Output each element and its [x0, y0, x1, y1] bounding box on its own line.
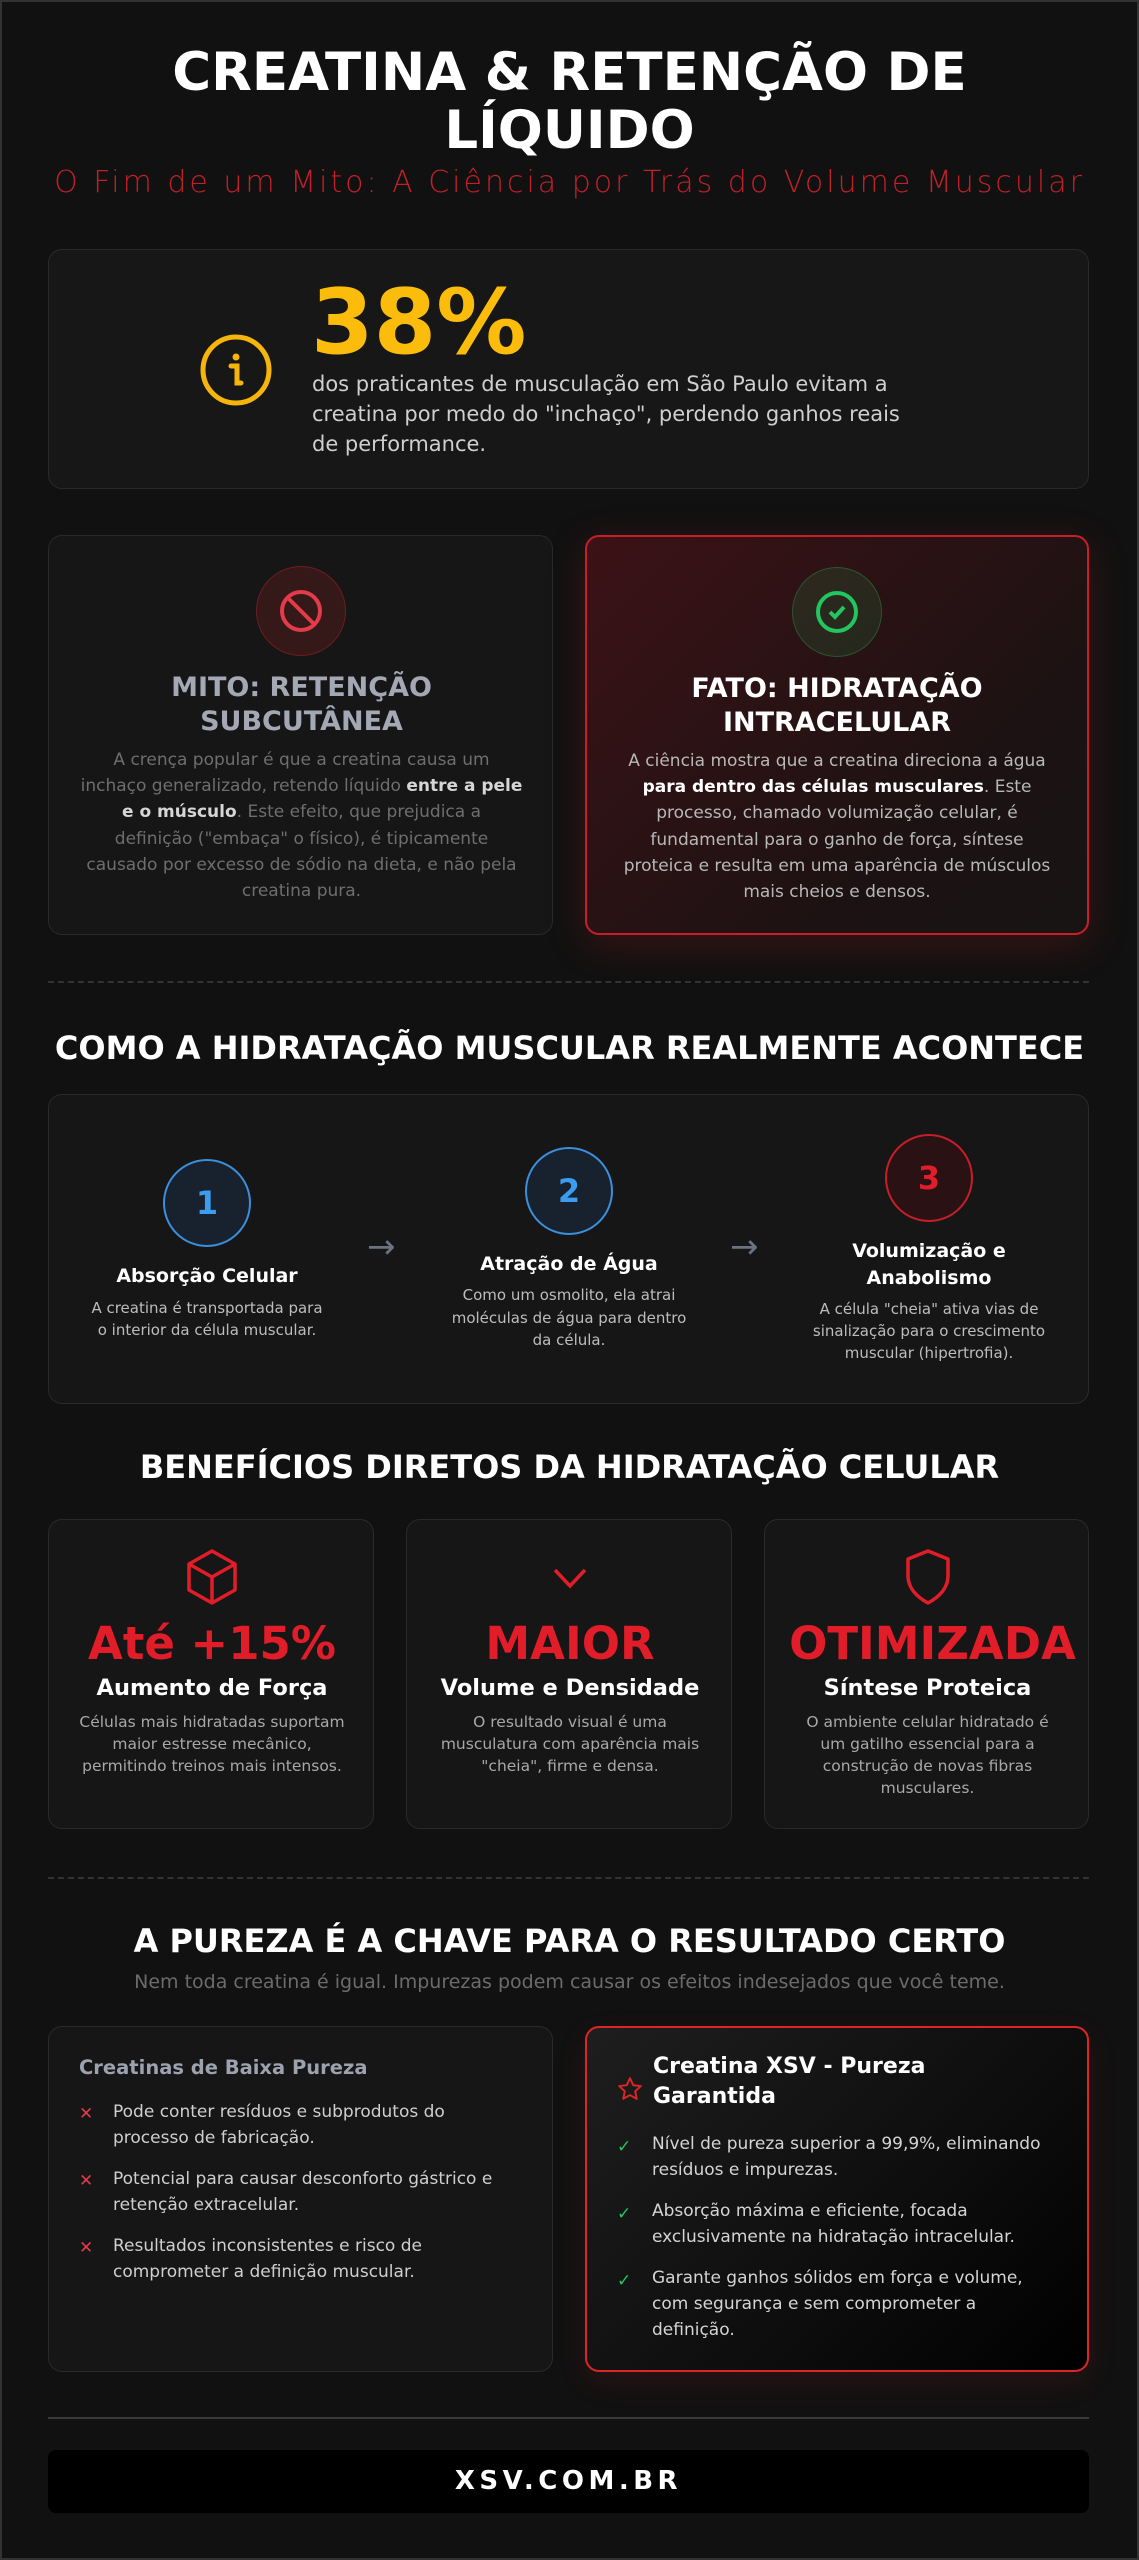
step 3: A célula "cheia" ativa vias de — [820, 1300, 1038, 1318]
list: negatives: retenção extracelular. — [113, 2195, 299, 2215]
icon: info — [200, 334, 272, 406]
fact text: A ciência mostra que a creatina direciona a água — [628, 751, 1046, 771]
footer — [48, 2450, 1089, 2513]
list: positives: resíduos e impurezas. — [652, 2160, 838, 2180]
benefit card 3: musculares. — [881, 1779, 974, 1797]
benefit card 2: O resultado visual é uma — [473, 1713, 667, 1731]
list: negatives: processo de fabricação. — [113, 2128, 315, 2148]
fact text: processo, chamado volumização celular, é — [656, 803, 1018, 823]
list: negatives: comprometer a definição muscular. — [113, 2262, 415, 2282]
benefit card 3: OTIMIZADA — [789, 1617, 1076, 1670]
step 2: Como um osmolito, ela atrai — [463, 1286, 675, 1304]
benefit card 1: Até +15% — [88, 1617, 336, 1670]
heading: process: COMO A HIDRATAÇÃO MUSCULAR REALMENTE ACONTECE — [55, 1029, 1084, 1067]
panel: low purity: Creatinas de Baixa Pureza — [79, 2056, 367, 2079]
step 1: Absorção Celular — [116, 1265, 298, 1287]
arrow 2: → — [730, 1227, 758, 1267]
list: positives: definição. — [652, 2320, 735, 2340]
list: negatives: ✕ — [79, 2171, 93, 2191]
list: positives: ✓ — [617, 2204, 631, 2224]
list: positives: ✓ — [617, 2271, 631, 2291]
panel: XSV — [585, 2026, 1089, 2372]
icon: check — [792, 567, 882, 657]
panel: XSV: Garantida — [653, 2084, 776, 2109]
fact text: fundamental para o ganho de força, síntese — [650, 830, 1024, 850]
title — [172, 41, 967, 161]
panel: myth — [48, 535, 553, 935]
step 2: da célula. — [533, 1331, 605, 1349]
fact text: para dentro das células musculares. Este — [643, 777, 1031, 797]
list: positives: com segurança e sem comprometer a — [652, 2294, 976, 2314]
myth text: creatina pura. — [242, 881, 361, 901]
benefit card 1: maior estresse mecânico, — [112, 1735, 312, 1753]
list: positives: exclusivamente na hidratação intracelular. — [652, 2227, 1015, 2247]
step 2: moléculas de água para dentro — [452, 1308, 686, 1326]
panel: process — [48, 1094, 1089, 1404]
benefit card 1: permitindo treinos mais intensos. — [82, 1757, 342, 1775]
benefit card 3: O ambiente celular hidratado é — [806, 1713, 1049, 1731]
heading: purity: A PUREZA É A CHAVE PARA O RESULTADO CERTO — [134, 1922, 1005, 1960]
benefit card 2: Volume e Densidade — [441, 1675, 699, 1701]
icon: shield — [906, 1549, 950, 1605]
fact heading: INTRACELULAR — [723, 707, 951, 738]
step 1: o interior da célula muscular. — [98, 1321, 316, 1339]
step 3: muscular (hipertrofia). — [845, 1344, 1013, 1362]
myth text: causado por excesso de sódio na dieta, e não pela — [86, 855, 517, 875]
icon: cube — [187, 1549, 237, 1605]
list: negatives: Resultados inconsistentes e risco de — [113, 2236, 422, 2256]
benefit card 1: Células mais hidratadas suportam — [79, 1713, 345, 1731]
myth text: e o músculo. Este efeito, que prejudica a — [122, 802, 481, 822]
step 3: sinalização para o crescimento — [813, 1322, 1045, 1340]
myth text: definição ("embaça" o físico), é tipicamente — [115, 829, 488, 849]
myth heading: MITO: RETENÇÃO — [171, 672, 432, 703]
benefit card 1: Aumento de Força — [97, 1675, 327, 1701]
list: negatives: Pode conter resíduos e subprodutos do — [113, 2102, 445, 2122]
title: LÍQUIDO — [444, 100, 695, 161]
fact heading — [691, 672, 983, 738]
icon: star — [618, 2077, 642, 2100]
step 3: 3 — [918, 1159, 940, 1197]
step 1: 1 — [196, 1184, 218, 1222]
benefit card 3 — [764, 1519, 1089, 1829]
list: positives: Garante ganhos sólidos em força e volume, — [652, 2268, 1023, 2288]
fact text — [624, 751, 1050, 902]
benefit card 1 — [48, 1519, 374, 1829]
step 1 — [91, 1159, 323, 1339]
step 3: Volumização e — [852, 1240, 1006, 1262]
benefit card 2 — [406, 1519, 732, 1829]
stat text: dos praticantes de musculação em São Paulo evitam a — [312, 372, 888, 396]
list: positives: ✓ — [617, 2137, 631, 2157]
step 1: A creatina é transportada para — [91, 1299, 323, 1317]
heading: benefits: BENEFÍCIOS DIRETOS DA HIDRATAÇÃO CELULAR — [140, 1448, 999, 1486]
fact text: mais cheios e densos. — [743, 882, 931, 902]
fact heading: FATO: HIDRATAÇÃO — [691, 673, 983, 704]
arrow 1: → — [367, 1227, 396, 1267]
stat text: de performance. — [312, 432, 486, 456]
list: positives: Nível de pureza superior a 99,9%, eliminando — [652, 2134, 1040, 2154]
subtitle: O Fim de um Mito: A Ciência por Trás do Volume Muscular — [54, 165, 1085, 200]
list: negatives: Potencial para causar desconforto gástrico e — [113, 2169, 492, 2189]
list: negatives: ✕ — [79, 2104, 93, 2124]
stat text — [312, 372, 900, 456]
myth text: inchaço generalizado, retendo líquido entre a pele — [81, 776, 522, 796]
panel: fact — [585, 535, 1089, 935]
step 3 — [813, 1134, 1045, 1362]
icon: forbidden — [256, 566, 346, 656]
title: CREATINA & RETENÇÃO DE — [172, 42, 967, 103]
icon: chevron — [554, 1568, 586, 1588]
list: positives — [617, 2134, 1040, 2340]
list: negatives — [79, 2102, 492, 2282]
stat number: 38% — [311, 270, 526, 375]
fact text: proteica e resulta em uma aparência de músculos — [624, 856, 1050, 876]
step 2 — [452, 1147, 686, 1349]
myth heading: SUBCUTÂNEA — [200, 706, 403, 737]
stat text: creatina por medo do "inchaço", perdendo ganhos reais — [312, 402, 900, 426]
list: positives: Absorção máxima e eficiente, focada — [652, 2201, 968, 2221]
benefit card 2: musculatura com aparência mais — [441, 1735, 699, 1753]
panel: low purity — [48, 2026, 553, 2372]
myth text — [81, 750, 522, 901]
benefit card 3: construção de novas fibras — [823, 1757, 1032, 1775]
myth text: A crença popular é que a creatina causa um — [113, 750, 490, 770]
step 2: 2 — [558, 1172, 580, 1210]
benefit card 3: um gatilho essencial para a — [820, 1735, 1035, 1753]
myth heading — [171, 671, 432, 737]
benefit card 2: MAIOR — [485, 1617, 655, 1670]
stat panel — [48, 249, 1089, 489]
benefit card 2: "cheia", firme e densa. — [481, 1757, 659, 1775]
step 2: Atração de Água — [480, 1253, 658, 1275]
purity subtitle: Nem toda creatina é igual. Impurezas podem causar os efeitos indesejados que você teme. — [134, 1971, 1005, 1993]
footer: XSV.COM.BR — [455, 2466, 682, 2496]
step 3: Anabolismo — [867, 1267, 991, 1289]
list: negatives: ✕ — [79, 2238, 93, 2258]
benefit card 3: Síntese Proteica — [824, 1675, 1031, 1701]
panel: XSV: Creatina XSV - Pureza — [653, 2054, 925, 2079]
